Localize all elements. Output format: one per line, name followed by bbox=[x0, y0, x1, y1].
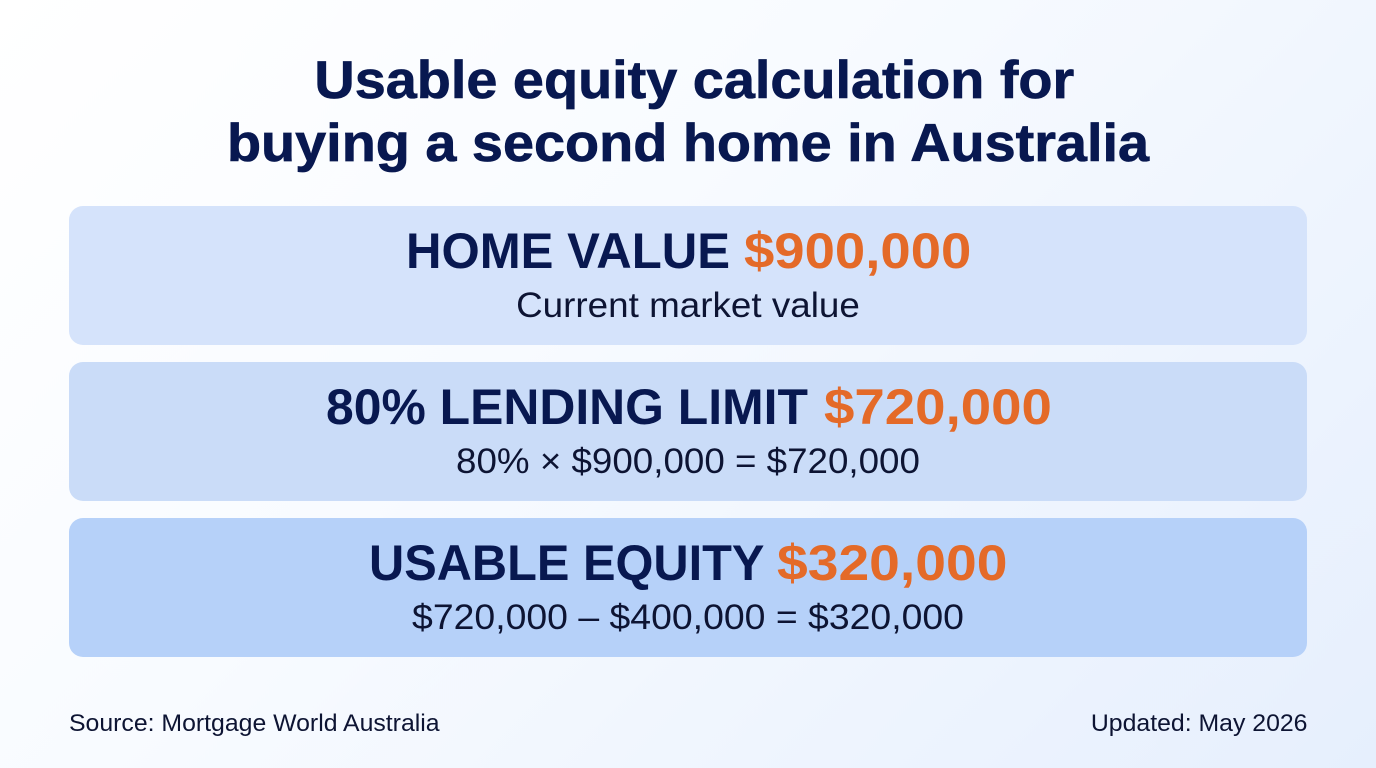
source note: Source: Mortgage World Australia bbox=[69, 710, 440, 737]
title bbox=[227, 51, 1150, 173]
updated note: Updated: May 2026 bbox=[1090, 710, 1307, 737]
heading: usable equity: $320,000 bbox=[777, 535, 1007, 591]
heading: home value: $900,000 bbox=[744, 223, 971, 279]
panel: lending limit bbox=[69, 362, 1307, 501]
panel: home value bbox=[69, 206, 1307, 345]
heading: home value bbox=[406, 223, 971, 279]
heading: home value: HOME VALUE bbox=[406, 223, 730, 279]
text: lending limit formula: 80% × $900,000 = $720,000 bbox=[456, 442, 920, 481]
heading: usable equity bbox=[368, 535, 1007, 591]
heading: usable equity: USABLE EQUITY bbox=[368, 535, 764, 591]
title: buying a second home in Australia bbox=[227, 114, 1149, 173]
heading: lending limit bbox=[326, 379, 1052, 435]
text: current market value: Current market value bbox=[516, 286, 860, 325]
panel: usable equity bbox=[69, 518, 1307, 657]
title: Usable equity calculation for bbox=[314, 51, 1074, 110]
heading: lending limit: $720,000 bbox=[824, 379, 1052, 435]
heading: lending limit: 80% LENDING LIMIT bbox=[326, 379, 808, 435]
text: usable equity formula: $720,000 – $400,000 = $320,000 bbox=[412, 598, 964, 637]
